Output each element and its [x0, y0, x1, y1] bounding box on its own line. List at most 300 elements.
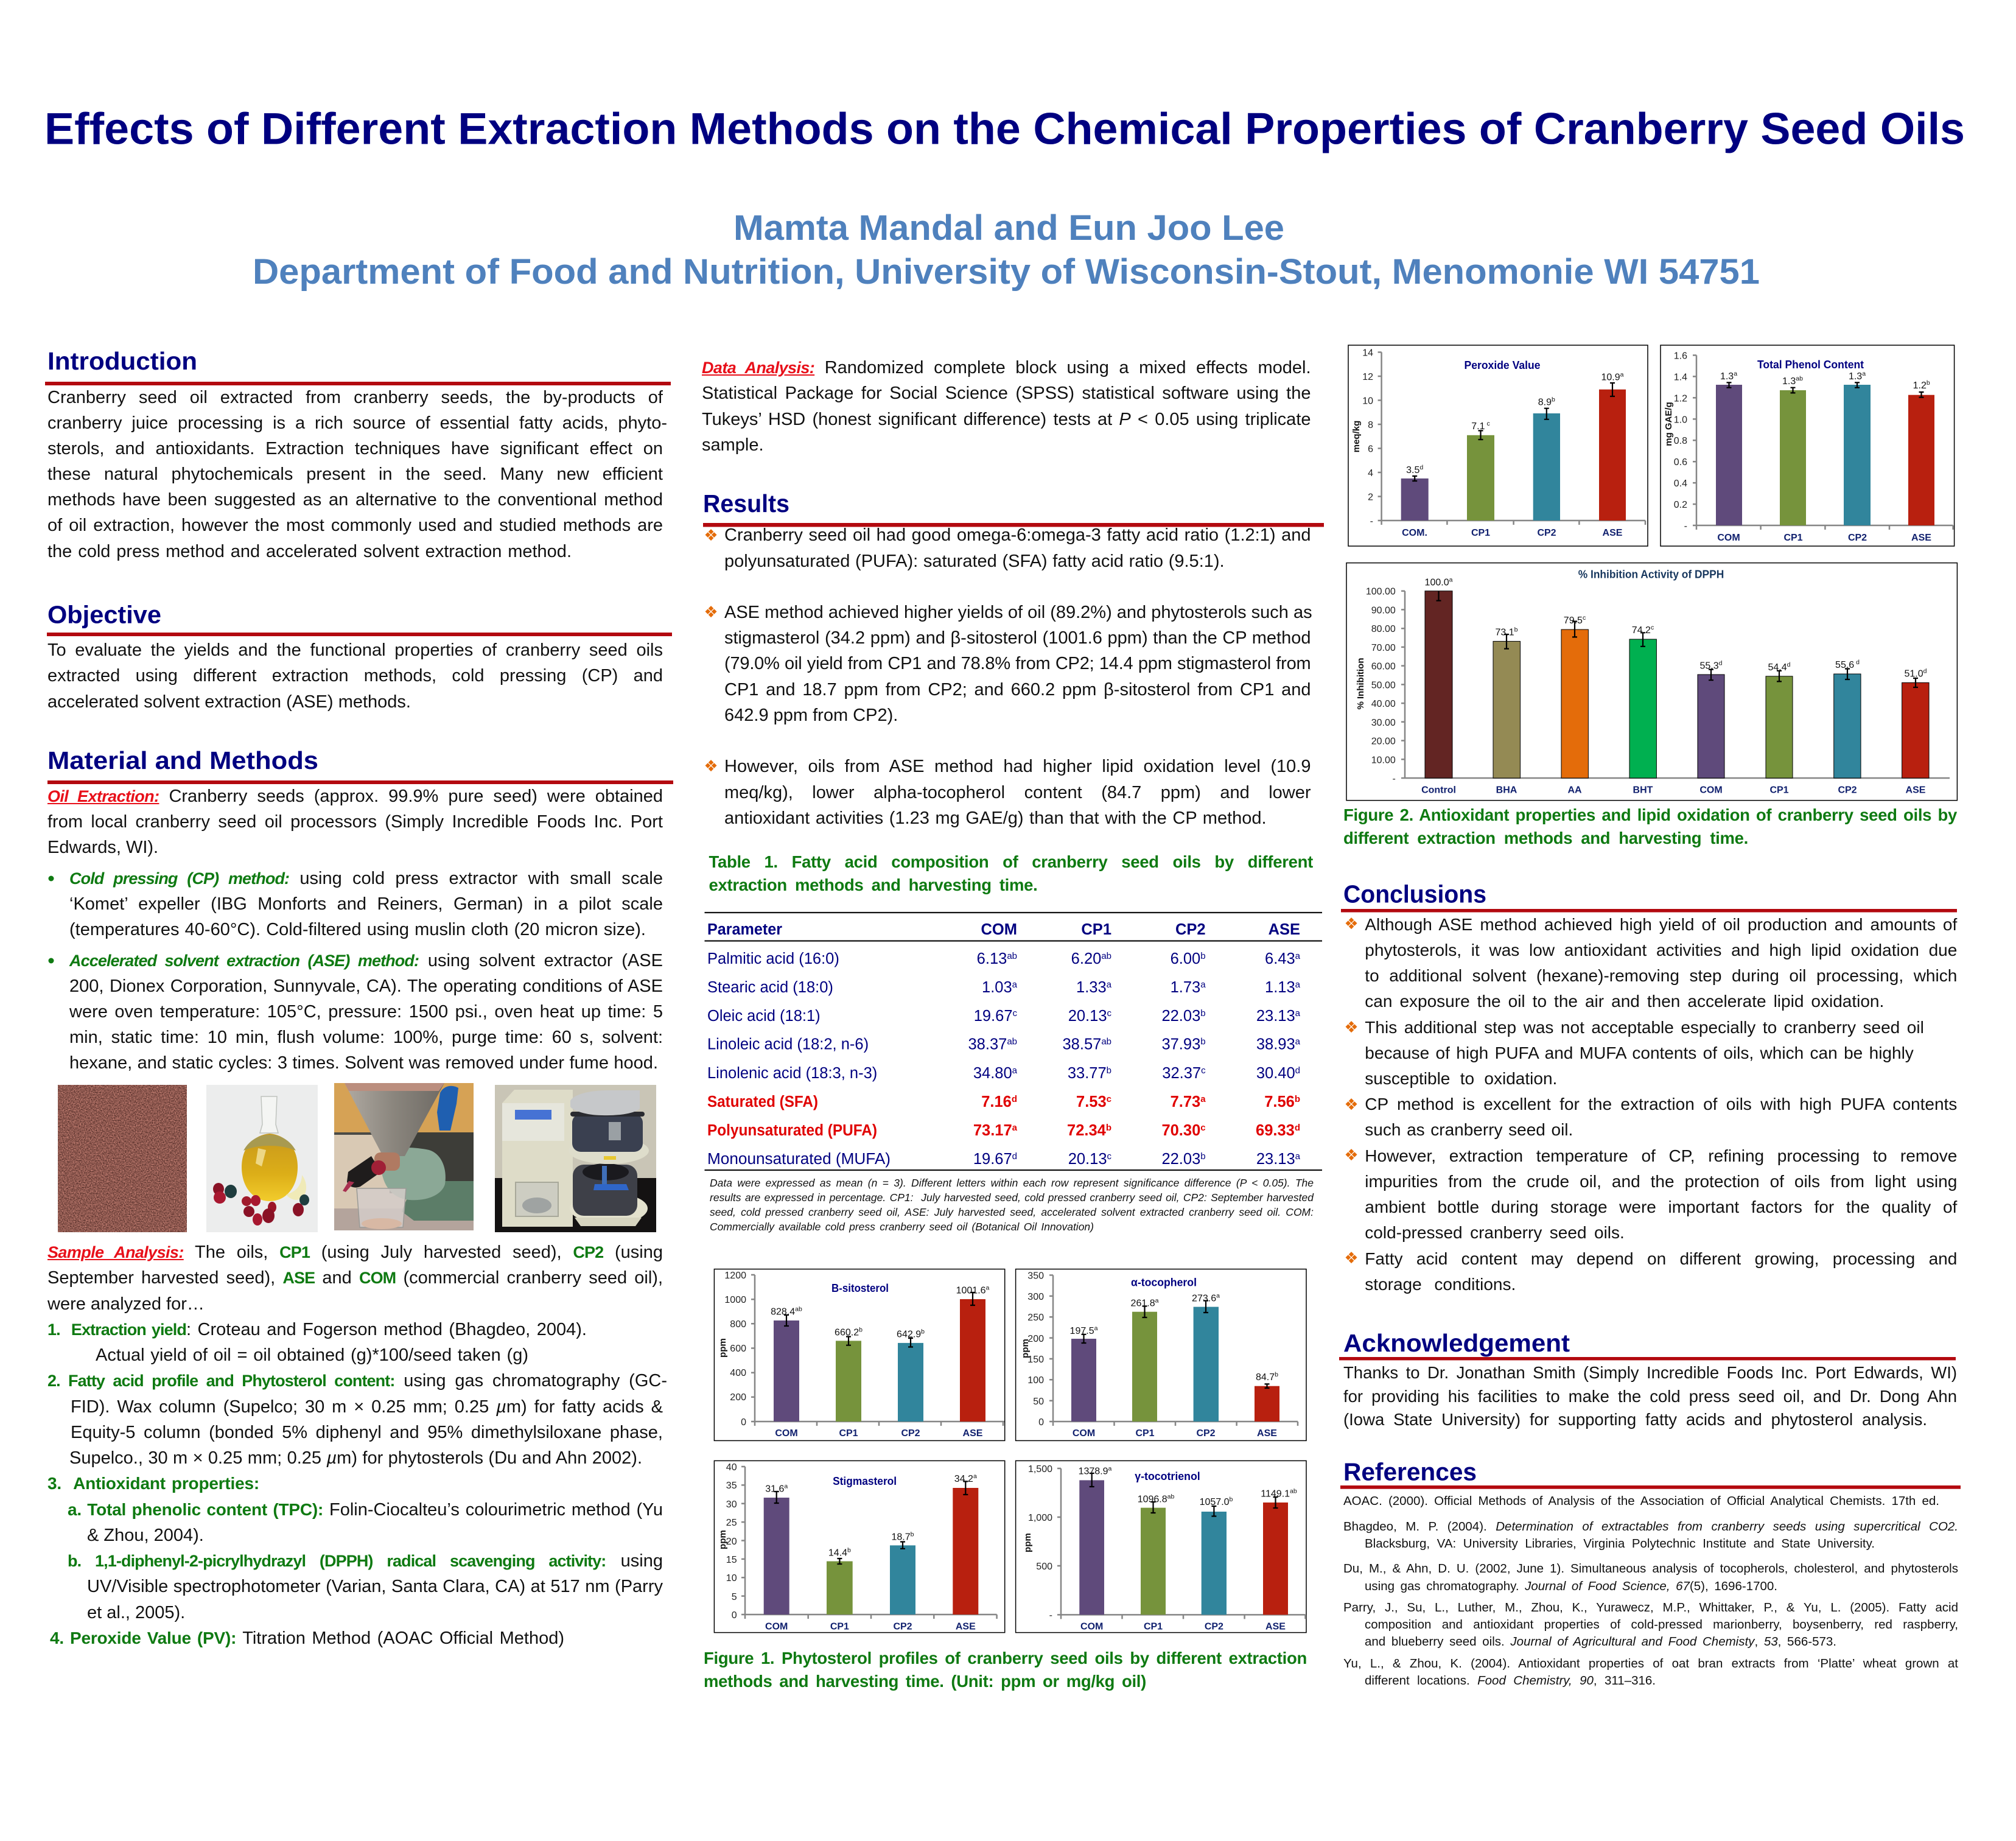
bar: ASE 10.9: a: [1620, 371, 1624, 379]
bar: CP1 261.8: a: [1155, 1297, 1159, 1304]
table header row: COM: [981, 921, 1017, 938]
row: palmitic acid: [707, 950, 1301, 967]
table note: results are expressed in percentage. CP1: July harvested seed, cold pressed cranberry seed oil, CP2: September harvested: [710, 1191, 1314, 1204]
bar: CP1 7.1: [1467, 420, 1494, 521]
axes: 80.00: [1371, 624, 1396, 634]
text: sample analysis: 1. Extraction yield: Croteau and Fogerson method (Bhagdeo, 2004).: [47, 1320, 587, 1339]
axes: 25: [726, 1518, 737, 1528]
bar: CP1 54.4: 54.4: [1768, 662, 1787, 673]
row: oleic acid: 19.67: [974, 1008, 1013, 1025]
text: objective: To evaluate the yields and the functional properties of cranberry seed oils: [47, 640, 663, 660]
bar: CP2 18.7: 18.7: [892, 1532, 911, 1543]
row: linolenic acid: 34.80: [973, 1065, 1012, 1082]
reference: Yu and Zhou: different locations. Food Chemistry, 90, 311–316.: [1365, 1674, 1656, 1688]
axes: 15: [726, 1555, 737, 1565]
axes: CP1: [1471, 528, 1490, 538]
axes: COM: [1073, 1428, 1095, 1439]
reference: Du and Ahn: using gas chromatography. Journal of Food Science, 67(5), 1696-1700.: [1365, 1579, 1777, 1593]
bar: COM 1378.9: [1079, 1465, 1112, 1615]
row: saturated: Saturated (SFA): [707, 1093, 818, 1110]
axes: 10.00: [1371, 755, 1396, 765]
chart: peroxide value: [1348, 345, 1648, 546]
axes: [724, 1271, 1004, 1439]
bar: ASE 1.2: [1908, 379, 1934, 525]
row: oleic acid: 23.13: [1256, 1008, 1295, 1025]
text: introduction: Cranberry seed oil extracted from cranberry seeds, the by-products of: [47, 388, 663, 407]
bar: COM 197.5: [1070, 1325, 1098, 1422]
text: conclusions: Fatty acid content may depend on different growing, processing and: [1365, 1249, 1957, 1268]
bar: BHT 74.2: [1629, 624, 1656, 778]
text: conclusions: CP method is excellent for the extraction of oils with high PUFA contents: [1365, 1095, 1957, 1113]
bar: CP2 18.7: b: [911, 1531, 914, 1538]
axes: 0.2: [1674, 500, 1687, 510]
bar: ASE 1001.6: 1001.6: [956, 1286, 986, 1296]
text: conclusions: However, extraction temperature of CP, refining processing to remove: [1365, 1146, 1957, 1165]
bar: ASE 10.9: 10.9: [1601, 373, 1620, 383]
axes: 400: [730, 1368, 746, 1378]
row: saturated: [707, 1093, 1300, 1110]
row: linoleic acid: Linoleic acid (18:2, n-6): [707, 1036, 869, 1053]
heading: Objective: [47, 600, 672, 636]
axes: 8: [1368, 420, 1373, 430]
table: fatty acid composition: [705, 913, 1322, 1170]
bar: CP2 1.3: [1844, 370, 1871, 525]
axes: CP2: [1537, 528, 1556, 538]
row: polyunsaturated: b: [1106, 1123, 1111, 1133]
bar: ASE 84.7: b: [1275, 1371, 1278, 1378]
text: result 2: CP1 and 18.7 ppm from CP2; and 660.2 ppm β-sitosterol from CP1 and: [724, 680, 1311, 700]
row: polyunsaturated: [707, 1122, 1300, 1139]
chart: total phenol content: [1661, 345, 1955, 546]
text: introduction: cranberry juice processing is a rich source of essential fatty acids, phyto-: [47, 413, 667, 433]
chart: stigmasterol: ppm: [718, 1530, 728, 1549]
row: oleic acid: a: [1295, 1008, 1301, 1019]
text: sample analysis: & Zhou, 2004).: [87, 1526, 204, 1545]
icon: results diamond bullets: ❖: [704, 757, 718, 776]
axes: 1200: [724, 1271, 746, 1281]
bar: CP2 642.9: b: [921, 1328, 925, 1336]
figure 2 caption: Figure 2. Antioxidant properties and lipid oxidation of cranberry seed oils by: [1343, 805, 1957, 824]
row: stearic acid: 1.33: [1076, 979, 1107, 996]
bar: ASE 84.7: [1255, 1371, 1279, 1422]
row: oleic acid: c: [1107, 1008, 1111, 1019]
photo: flask of oil with cranberries: [206, 1085, 318, 1232]
row: oleic acid: [707, 1008, 1301, 1025]
text: conclusions: [1365, 915, 1958, 1294]
row: palmitic acid: 6.20: [1071, 950, 1101, 967]
axes: ASE: [1603, 528, 1623, 538]
text: result 2: stigmasterol (34.2 ppm) and β-sitosterol (1001.6 ppm) than the CP method: [724, 628, 1311, 648]
text: result 1: [724, 525, 1311, 571]
text: accelerated solvent extraction method: hexane, and static cycles: 3 times. Solvent was removed under fume hood.: [69, 1053, 658, 1073]
axes: CP1: [830, 1621, 849, 1632]
bar: CP2 55.6: d: [1854, 659, 1860, 666]
chart: total phenol content: Total Phenol Content: [1757, 359, 1864, 371]
text: conclusions: susceptible to oxidation.: [1365, 1069, 1557, 1088]
table header row: [707, 921, 1300, 938]
photo: accelerated solvent extractor: [495, 1085, 656, 1232]
bar: CP2 18.7: [890, 1531, 915, 1615]
text: result 2: ASE method achieved higher yields of oil (89.2%) and phytosterols such as: [724, 603, 1312, 622]
row: oleic acid: c: [1013, 1008, 1018, 1019]
icon: conclusions diamond bullets: ❖: [1344, 1019, 1359, 1037]
heading: Acknowledgement: [1339, 1329, 1956, 1360]
chart: gamma-tocotrienol: ppm: [1023, 1533, 1033, 1552]
bar: COM 31.6: a: [784, 1482, 788, 1490]
reference: Bhagdeo: Blacksburg, VA: University Libraries, Virginia Polytechnic Institute and State University.: [1365, 1537, 1875, 1551]
row: stearic acid: a: [1200, 980, 1206, 990]
bar: CP1 1.3: ab: [1796, 375, 1803, 382]
text: result 1: polyunsaturated (PUFA): saturated (SFA) fatty acid ratio (9.5:1).: [724, 552, 1225, 571]
text: data analysis: Data Analysis: Randomized complete block using a mixed effects model.: [702, 358, 1311, 377]
axes: 0: [1038, 1417, 1044, 1428]
text: introduction: sterols, and antioxidants. Extraction techniques have significant effect on: [47, 439, 663, 458]
text: acknowledgement: for providing his facilities to make the cold press seed oil, and Dr. Dong Ahn: [1343, 1387, 1957, 1406]
axes: -: [1370, 516, 1373, 527]
chart: total phenol content: mg GAE/g: [1664, 402, 1674, 446]
bar: CP1 660.2: 660.2: [835, 1328, 859, 1338]
text: cold pressing method: [69, 869, 663, 939]
row: oleic acid: 20.13: [1068, 1008, 1107, 1025]
axes: COM: [775, 1428, 798, 1439]
row: polyunsaturated: 73.17: [973, 1122, 1012, 1139]
bar: COM 3.5: 3.5: [1406, 465, 1419, 475]
bar: CP2 8.9: b: [1552, 396, 1555, 404]
row: linolenic acid: a: [1012, 1065, 1018, 1076]
text: oil extraction: [47, 787, 663, 857]
bar: CP2 8.9: [1533, 396, 1560, 521]
axes: 100: [1027, 1375, 1044, 1386]
bar: CP2 55.6: [1834, 659, 1861, 778]
axes: 350: [1027, 1271, 1044, 1281]
row: stearic acid: [707, 979, 1301, 996]
bar: Control 100.0: [1425, 576, 1453, 778]
chart: DPPH inhibition: [1346, 563, 1957, 801]
text: accelerated solvent extraction method: were oven temperature: 105°C, pressure: 1500 psi., oven heat up time: 5: [69, 1002, 663, 1022]
reference: AOAC: AOAC. (2000). Official Methods of Analysis of the Association of Official Analytical Chemists. 17th ed.: [1343, 1494, 1939, 1508]
text: accelerated solvent extraction method: [69, 951, 663, 1073]
row: monounsaturated: [707, 1151, 1301, 1168]
axes: COM.: [1402, 528, 1427, 538]
text: introduction: the cold press method and accelerated solvent extraction method.: [47, 542, 572, 561]
chart: B-sitosterol: [714, 1269, 1005, 1440]
icon: results diamond bullets: ❖: [704, 527, 718, 545]
heading: Introduction: [45, 347, 671, 385]
axes: 90.00: [1371, 605, 1396, 615]
bar: CP1 14.4: b: [847, 1547, 851, 1554]
heading: References: [1340, 1458, 1961, 1489]
chart: gamma-tocotrienol: γ-tocotrienol: [1135, 1470, 1200, 1482]
chart: B-sitosterol: B-sitosterol: [831, 1282, 889, 1294]
axes: 1.6: [1674, 351, 1687, 362]
axes: Control: [1421, 785, 1456, 796]
row: linolenic acid: 32.37: [1162, 1065, 1201, 1082]
axes: 30: [726, 1499, 737, 1510]
row: oleic acid: b: [1200, 1008, 1206, 1019]
text: conclusions: to additional solvent (hexane)-removing step during oil processing, which: [1365, 966, 1957, 985]
bar: CP1 1096.8: [1138, 1493, 1174, 1615]
reference: Parry: Parry, J., Su, L., Luther, M., Zhou, K., Yurawecz, M.P., Whittaker, P., & Yu, L. (2005). Fatty acid: [1343, 1601, 1958, 1615]
bar: ASE 51.0: 51.0: [1905, 669, 1923, 679]
bar: COM 1378.9: a: [1108, 1465, 1112, 1473]
axes: 35: [726, 1481, 737, 1491]
figure 1 caption: methods and harvesting time. (Unit: ppm or mg/kg oil): [704, 1672, 1146, 1690]
bar: AA 79.5: 79.5: [1564, 615, 1583, 626]
axes: 20.00: [1371, 737, 1396, 746]
axes: 600: [730, 1344, 746, 1354]
text: sample analysis: were analyzed for…: [47, 1294, 205, 1314]
axes: ASE: [1257, 1428, 1277, 1439]
axes: 50.00: [1371, 680, 1396, 690]
row: linoleic acid: 38.93: [1256, 1036, 1295, 1053]
table header row: Parameter: [707, 921, 782, 938]
row: saturated: a: [1200, 1094, 1206, 1104]
row: linolenic acid: 30.40: [1256, 1065, 1295, 1082]
row: linolenic acid: [707, 1065, 1300, 1082]
text: accelerated solvent extraction method: Accelerated solvent extraction (ASE) method: using solvent extractor (ASE: [69, 951, 663, 970]
title: Effects of Different Extraction Methods on the Chemical Properties of Cranberry Seed Oils: [44, 105, 1965, 154]
axes: 500: [1036, 1562, 1052, 1572]
bar: ASE 1.2: b: [1927, 379, 1930, 387]
row: linoleic acid: a: [1295, 1037, 1301, 1047]
row: palmitic acid: Palmitic acid (16:0): [707, 950, 839, 967]
bar: BHT 74.2: c: [1651, 624, 1654, 631]
row: linolenic acid: Linolenic acid (18:3, n-3): [707, 1065, 877, 1082]
row: monounsaturated: d: [1012, 1151, 1017, 1162]
axes: [726, 1462, 997, 1632]
text: sample analysis: UV/Visible spectrophotometer (Varian, Santa Clara, CA) at 517 nm (Parry: [87, 1577, 663, 1596]
reference: Parry: [1343, 1601, 1958, 1649]
reference: Du and Ahn: Du, M., & Ahn, D. U. (2002, June 1). Simultaneous analysis of tocopherols, cholesterol, and phytosterols: [1343, 1562, 1958, 1576]
text: data analysis: Statistical Package for Social Science (SPSS) statistical software using the: [702, 384, 1311, 403]
axes: 0: [732, 1610, 737, 1621]
row: stearic acid: 1.03: [982, 979, 1012, 996]
axes: 5: [732, 1592, 737, 1602]
axes: AA: [1567, 785, 1582, 796]
row: linoleic acid: ab: [1007, 1037, 1017, 1047]
axes: 10: [726, 1573, 737, 1583]
chart: stigmasterol: Stigmasterol: [833, 1475, 897, 1487]
axes: BHT: [1633, 785, 1653, 796]
text: sample analysis: a. Total phenolic content (TPC): Folin-Ciocalteu’s colourimetric method (Yu: [68, 1500, 663, 1520]
bar: CP2 1057.0: 1057.0: [1200, 1497, 1230, 1507]
axes: BHA: [1496, 785, 1517, 796]
axes: COM: [765, 1621, 788, 1632]
row: palmitic acid: 6.43: [1265, 950, 1295, 967]
text: result 2: [724, 603, 1312, 725]
text: conclusions: ambient bottle during storage were important factors for the quality of: [1365, 1198, 1957, 1216]
bar: COM 31.6: [764, 1482, 789, 1615]
bar: COM 828.4: 828.4: [771, 1307, 795, 1317]
row: palmitic acid: ab: [1101, 951, 1111, 961]
axes: 12: [1362, 372, 1373, 382]
bar: BHA 73.1: [1493, 626, 1521, 778]
row: polyunsaturated: c: [1200, 1123, 1206, 1133]
table note: Data were expressed as mean (n = 3). Different letters within each row represent significance difference (P < 0.05). The: [710, 1177, 1314, 1189]
axes: CP1: [1783, 533, 1803, 543]
text: sample analysis: FID). Wax column (Supelco; 30 m × 0.25 mm; 0.25 µm) for fatty acids &: [71, 1397, 663, 1417]
axes: -: [1392, 774, 1396, 784]
row: oleic acid: Oleic acid (18:1): [707, 1008, 821, 1025]
bar: CP2 642.9: [897, 1328, 925, 1422]
bar: ASE 1001.6: [956, 1285, 990, 1422]
row: stearic acid: a: [1107, 980, 1112, 990]
axes: 50: [1033, 1397, 1044, 1407]
text: acknowledgement: (Iowa State University) for supporting fatty acids and phytosterol analysis.: [1343, 1410, 1927, 1429]
text: sample analysis: [47, 1243, 667, 1648]
axes: [1028, 1464, 1305, 1632]
text: data analysis: [702, 358, 1311, 455]
row: polyunsaturated: 72.34: [1067, 1122, 1106, 1139]
row: monounsaturated: a: [1295, 1151, 1301, 1162]
text: sample analysis: Actual yield of oil = oil obtained (g)*100/seed taken (g): [96, 1345, 528, 1365]
bar: COM 828.4: [771, 1306, 802, 1422]
bar: CP1 54.4: [1766, 661, 1793, 778]
row: palmitic acid: 6.00: [1171, 950, 1200, 967]
row: stearic acid: 1.13: [1265, 979, 1295, 996]
axes: 0.4: [1674, 479, 1687, 489]
bar: CP1 261.8: 261.8: [1131, 1298, 1155, 1309]
row: stearic acid: 1.73: [1171, 979, 1200, 996]
chart: alpha-tocopherol: ppm: [1020, 1339, 1031, 1358]
axes: 250: [1027, 1313, 1044, 1323]
heading: Conclusions: Conclusions: [1343, 880, 1486, 908]
axes: 0.8: [1674, 436, 1687, 446]
row: polyunsaturated: Polyunsaturated (PUFA): [707, 1122, 877, 1139]
axes: CP2: [1848, 533, 1867, 543]
row: linolenic acid: b: [1107, 1065, 1111, 1076]
bar: AA 79.5: [1561, 614, 1588, 778]
axes: 2: [1368, 492, 1373, 503]
chart: DPPH inhibition: % Inhibition: [1356, 658, 1366, 709]
text: acknowledgement: [1343, 1363, 1957, 1429]
axes: 0.6: [1674, 457, 1687, 468]
icon: results diamond bullets: ❖: [704, 603, 718, 622]
row: monounsaturated: c: [1107, 1151, 1111, 1162]
bar: CP1 1.3: 1.3: [1782, 376, 1796, 387]
text: data analysis: sample.: [702, 435, 764, 455]
axes: 40: [726, 1462, 737, 1473]
bar: COM 3.5: [1401, 464, 1429, 521]
row: stearic acid: a: [1012, 980, 1018, 990]
axes: 10: [1362, 396, 1373, 407]
text: oil extraction: Edwards, WI).: [47, 838, 158, 857]
axes: 1.0: [1674, 415, 1687, 425]
axes: [1362, 348, 1645, 538]
axes: 1,500: [1028, 1464, 1052, 1475]
axes: ASE: [956, 1621, 976, 1632]
reference: Parry: composition and antioxidant properties of cold-pressed marionberry, boysenberry, red raspberry,: [1365, 1618, 1958, 1632]
text: cold pressing method: (temperatures 40-60°C). Cold-filtered using muslin cloth (20 micron size).: [69, 920, 646, 939]
row: polyunsaturated: 70.30: [1161, 1122, 1200, 1139]
axes: CP2: [1196, 1428, 1216, 1439]
bar: CP1 261.8: [1131, 1297, 1159, 1422]
bar: ASE 84.7: 84.7: [1256, 1372, 1275, 1383]
bar: Control 100.0: a: [1449, 576, 1453, 583]
bar: ASE 1001.6: a: [986, 1285, 990, 1292]
table header row: ASE: [1269, 921, 1300, 938]
bar: CP2 1057.0: b: [1230, 1496, 1233, 1503]
row: monounsaturated: 19.67: [973, 1151, 1012, 1168]
row: saturated: 7.56: [1264, 1093, 1295, 1110]
chart: alpha-tocopherol: [1016, 1269, 1306, 1440]
axes: [1027, 1271, 1298, 1439]
bar: ASE 34.2: a: [973, 1473, 977, 1480]
row: saturated: 7.53: [1076, 1093, 1107, 1110]
axes: 0: [741, 1417, 746, 1428]
text: sample analysis: Sample Analysis: The oils, CP1 (using July harvested seed), CP2 (using: [47, 1243, 663, 1262]
text: conclusions: This additional step was not acceptable especially to cranberry seed oil: [1365, 1018, 1924, 1037]
row: polyunsaturated: a: [1012, 1123, 1018, 1133]
bar: ASE 1149.1: [1261, 1487, 1297, 1615]
heading: Acknowledgement: Acknowledgement: [1343, 1329, 1570, 1357]
text: data analysis: Tukeys’ HSD (honest significant difference) tests at P < 0.05 using triplicate: [702, 410, 1311, 429]
row: saturated: d: [1012, 1094, 1017, 1104]
text: conclusions: Although ASE method achieved high yield of oil production and amounts of: [1365, 915, 1957, 934]
axes: 1000: [724, 1295, 746, 1305]
axes: 100.00: [1366, 587, 1396, 597]
bar: CP2 273.6: [1192, 1292, 1220, 1422]
axes: 4: [1368, 468, 1373, 479]
chart: alpha-tocopherol: α-tocopherol: [1131, 1276, 1197, 1288]
bar: Control 100.0: 100.0: [1425, 577, 1449, 587]
axes: 200: [1027, 1334, 1044, 1344]
reference: Bhagdeo: Bhagdeo, M. P. (2004). Determination of extractables from cranberry seeds using supercritical CO2.: [1343, 1520, 1958, 1534]
chart: peroxide value: meq/kg: [1351, 421, 1362, 452]
bar: CP1 1096.8: 1096.8: [1138, 1494, 1167, 1504]
axes: CP1: [839, 1428, 858, 1439]
bar: COM 3.5: d: [1419, 464, 1423, 471]
icon: results diamond bullets: [704, 527, 718, 776]
bar: CP2 8.9: 8.9: [1538, 398, 1552, 408]
icon: bullet dots for extraction methods: [49, 875, 54, 963]
axes: 1.4: [1674, 373, 1687, 382]
text: conclusions: phytosterols, it was low antioxidant activities and high lipid oxidation due: [1365, 941, 1957, 959]
chart: B-sitosterol: ppm: [718, 1338, 728, 1358]
bar: CP2 1057.0: [1200, 1496, 1233, 1615]
text: conclusions: such as cranberry seed oil.: [1365, 1120, 1573, 1139]
text: sample analysis: Equity-5 column (bonded 5% diphenyl and 95% dimethylsiloxane phase,: [71, 1423, 663, 1442]
bar: BHT 74.2: 74.2: [1632, 625, 1651, 636]
row: linoleic acid: b: [1200, 1037, 1206, 1047]
bar: COM 197.5: a: [1094, 1325, 1098, 1332]
text: oil extraction: from local cranberry seed oil processors (Simply Incredible Foods Inc. Port: [47, 812, 663, 832]
bar: COM 1.3: [1716, 370, 1742, 525]
figure 1 caption: [704, 1649, 1307, 1691]
axes: 14: [1362, 348, 1373, 358]
photo: cranberry seeds: [58, 1085, 187, 1232]
axes: CP1: [1769, 785, 1789, 796]
bar: COM 55.3: d: [1719, 660, 1723, 667]
bar: CP1 1.3: [1780, 375, 1806, 525]
bar: COM 828.4: ab: [795, 1306, 802, 1313]
text: conclusions: because of high PUFA and MUFA contents of oils, which can be highly: [1365, 1043, 1914, 1062]
text: introduction: methods have been suggested as an alternative to the conventional method: [47, 490, 663, 510]
bar: COM 55.3: [1698, 660, 1724, 778]
axes: 300: [1027, 1292, 1044, 1302]
chart: gamma-tocotrienol: [1016, 1461, 1306, 1633]
row: polyunsaturated: 69.33: [1256, 1122, 1295, 1139]
bar: CP2 1.3: a: [1862, 370, 1866, 377]
heading: References: References: [1343, 1458, 1477, 1486]
heading: Objective: Objective: [47, 600, 161, 628]
axes: -: [1049, 1610, 1052, 1621]
text: objective: [47, 640, 663, 712]
bar: CP1 54.4: d: [1787, 661, 1791, 668]
bar: CP1 14.4: [827, 1547, 853, 1615]
text: accelerated solvent extraction method: 200, Dionex Corporation, Sunnyvale, CA). The operating conditions of ASE: [69, 977, 663, 996]
axes: COM: [1699, 785, 1723, 796]
